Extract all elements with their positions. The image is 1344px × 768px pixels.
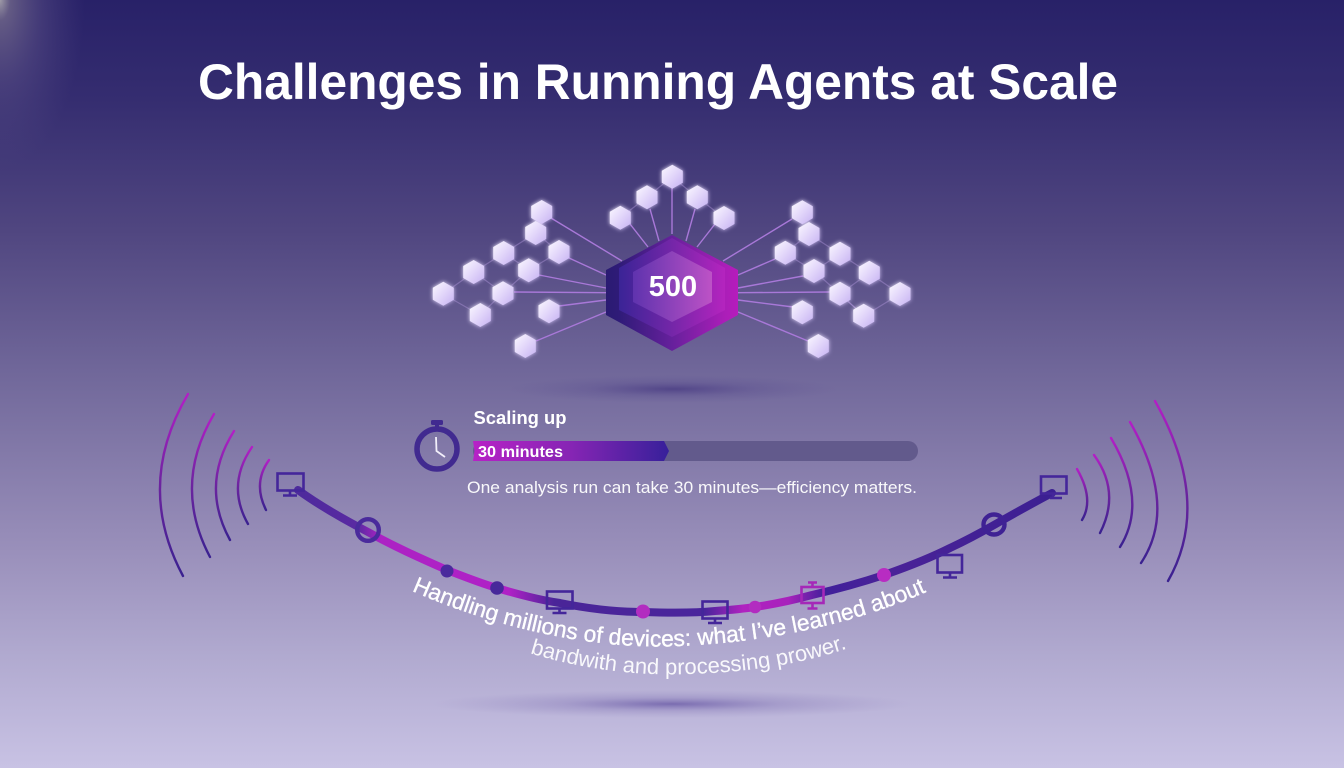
monitor: centre [702,602,728,623]
left node cluster [433,200,570,358]
panel description: One analysis run can take 30 minutes—efficiency matters. [467,479,917,497]
faint links between nodes [443,177,900,316]
stopwatch icon [417,420,457,469]
connector lines to hub [514,188,830,341]
central hub hexagon [606,235,738,351]
title: Challenges in Running Agents at Scale [198,54,1118,110]
curved caption [413,576,926,679]
scaling up panel [417,408,918,497]
monitor: left end [278,474,304,496]
device connection curve [298,490,1052,613]
network diagram [433,165,910,358]
right node cluster [775,200,910,358]
right signal arcs [1077,401,1187,581]
monitor: lower left [547,592,572,613]
monitor: lower right [938,555,962,578]
hub shadow [508,375,838,403]
left signal arcs [160,394,269,576]
progress fill [473,441,669,461]
hub number: 500 [649,271,697,303]
monitor icons [278,474,1066,623]
curve nodes [357,514,1004,618]
top node cluster [610,165,734,230]
progress label: 30 minutes [478,444,563,461]
floor shadow [432,690,912,718]
caption line 1: Handling millions of devices: what I’ve learned about [413,576,926,647]
progress track [473,441,918,461]
monitor: magenta [802,582,824,608]
monitor: right end [1041,476,1066,498]
panel heading: Scaling up [474,408,566,428]
caption line 2: bandwith and processing prower. [531,638,846,679]
corner light glow [0,0,100,180]
